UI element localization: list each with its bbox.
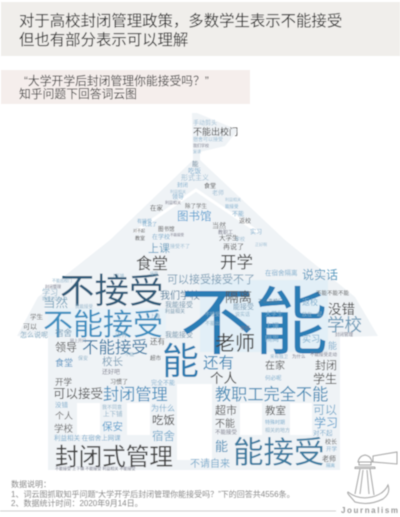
main words, centre and right: 还有 [203, 354, 234, 372]
main words, centre and right: 不能出 [205, 320, 220, 327]
flag words: 我们学校 [193, 142, 209, 148]
panel: title banner [1, 2, 400, 56]
main words, left: 食堂 [55, 357, 73, 368]
tower roof words: 学校 [235, 236, 245, 243]
main words, centre and right: 大学生 [265, 310, 283, 318]
tower roof words: 不能 [232, 210, 244, 218]
lower house words: 开学 [55, 377, 73, 387]
tower roof words: 老师 [212, 189, 224, 197]
lower house words: 上下铺 [103, 409, 123, 418]
upper house words: 食堂 [136, 255, 168, 273]
chart: school-shaped word cloud [17, 113, 378, 471]
tower roof words: 吃饭 [188, 166, 202, 175]
tower roof words: 实习 [250, 228, 262, 236]
panel: title banner: 但也有部分表示可以理解 [19, 31, 188, 49]
tower roof words: 领导 [172, 193, 184, 201]
upper house words: 接受不了 [170, 243, 190, 250]
main words, left: 领导 [55, 341, 77, 354]
tower roof words: 图书馆 [158, 225, 175, 233]
flag words: 不能出校门 [193, 126, 238, 137]
lower house words: 对不起 [313, 428, 333, 437]
tower roof words: 正好啊 [255, 241, 267, 247]
tower roof words: 教职工 [218, 229, 233, 236]
lower house words: 能接受 [233, 436, 324, 470]
lower house words: 相关的地方 [265, 427, 290, 434]
lower house words: 学校 [54, 423, 74, 435]
lower house words: 不能 [215, 417, 235, 430]
lower house words: 没错 [55, 400, 68, 409]
main words, left: 可以接受接受不了 [167, 273, 255, 286]
main words, left: 超市 [150, 354, 162, 362]
flag words: 复课 [193, 148, 201, 154]
main words, centre and right [162, 281, 362, 382]
lower house words: 个人 [55, 411, 73, 421]
main words, centre and right: 封闭 [315, 358, 337, 372]
main words, centre and right: 不能接受走动 [310, 351, 337, 358]
main words, centre and right: 上课 [265, 321, 279, 330]
lower house words: 封闭式管理 [55, 444, 173, 471]
main words, centre and right: 老师 [215, 332, 255, 355]
main words, left: 网上开门 [70, 337, 86, 343]
tower roof words: 当然 [212, 221, 226, 230]
main words, left: 我能接受 [165, 300, 193, 309]
lower house words: 可以接受 [53, 386, 103, 401]
tower roof words: 食堂 [204, 182, 216, 190]
tower roof words: 封闭 [177, 181, 188, 189]
lower house words: 校长 [325, 438, 337, 446]
main words, left: 怎么说呢 [20, 330, 48, 339]
main words, centre and right: 放在一起 [302, 311, 322, 318]
main words, centre and right: 不能不能不能 [316, 289, 350, 297]
main words, centre and right: 隔离 [265, 334, 279, 343]
flag words: 能 [192, 159, 199, 168]
main words, left: 不接受 [60, 273, 164, 311]
lower house words: 何必呢 [265, 374, 282, 382]
lower house words: 特殊时期 [265, 419, 285, 426]
lower house words: 不请自来 [190, 457, 230, 470]
lower house words: 不能接受 上下铺 不能接受 利益相关 不能接受 [55, 465, 135, 471]
flag words: 宿舍可以接受 [193, 136, 223, 143]
main words, left: 还有 [115, 331, 127, 339]
lower house words: 可以 [313, 403, 337, 417]
lower house words: 教室 [265, 404, 286, 417]
main words, centre and right: 不能 [180, 281, 328, 364]
lower house words: 学习 [314, 415, 338, 430]
data notes [11, 479, 295, 508]
main words, left: 不能接受 [82, 338, 148, 357]
lower house words: 宿舍 [152, 429, 175, 443]
main words, left: 学习 [42, 287, 58, 297]
tower roof words: 除了学生 [185, 202, 208, 210]
tower roof words: 利益相关 [165, 199, 181, 205]
icon: lighthouse logo [348, 452, 397, 503]
main words, centre and right: 能 [328, 340, 337, 351]
main words, left: 封闭管理 [45, 283, 61, 289]
main words, left: 学生 [30, 312, 44, 321]
main words, centre and right: 实习 [302, 333, 320, 344]
main words, left: 可以 [23, 323, 37, 331]
lower house words: 还好吧 [102, 368, 120, 376]
main words, left: 利益相关 [165, 308, 185, 315]
tower roof words: 在家 [150, 203, 164, 212]
main words, centre and right: 封闭管理 [335, 331, 353, 338]
tower roof words: 图书馆 [177, 209, 212, 223]
tower roof words: 不能接受 [170, 232, 184, 237]
main words, centre and right: 没错 [328, 302, 355, 317]
tower roof words: 形式主义 [181, 173, 209, 182]
tower roof words: 能接受 [225, 203, 239, 210]
tower roof words: 大学生 [219, 233, 239, 242]
main words, left: 还有 [150, 336, 165, 346]
main words, centre and right: 返校 [302, 297, 318, 307]
lower house words: 完全不能 [151, 379, 175, 387]
main words, centre and right: 说实话 [235, 311, 250, 318]
panel: title banner: 对于高校封闭管理政策，多数学生表示不能接受 [19, 12, 342, 30]
lower house words: 吃饭 [152, 413, 175, 427]
main words, left: 不能出校门 [52, 277, 72, 283]
lower house words: 保安 [102, 420, 123, 433]
main words, left: 保安 [78, 355, 88, 362]
main words, centre and right: 能接受 [233, 302, 254, 311]
tower roof words: 返校 [239, 217, 251, 225]
main words, centre and right: 不接受 [205, 311, 220, 318]
data notes: 1、词云图抓取知乎问题“大学开学后封闭管理你能接受吗？”下的回答共4556条。 [11, 489, 295, 499]
lower house words: 我不同意 [102, 404, 122, 411]
lower house words: 超市 [215, 403, 237, 417]
main words, centre and right: 不以来校门 [258, 298, 283, 305]
lower house words: 能 [215, 439, 228, 454]
main words, left [20, 270, 255, 368]
main words, centre and right: 学校 [327, 315, 362, 335]
panel: chart subtitle [1, 70, 250, 104]
data notes: 2、数据统计时间：2020年9月14日。 [11, 498, 143, 508]
main words, centre and right: 在家 [265, 359, 285, 372]
main words, left: 校长 [102, 355, 123, 368]
panel: chart subtitle: “大学开学后封闭管理你能接受吗？” [24, 74, 209, 88]
main words, centre and right: 能 [162, 341, 199, 382]
main words, left: 宿舍 [55, 328, 73, 338]
lower house words: 老师 [322, 454, 336, 463]
tower roof words [133, 166, 267, 247]
upper house words [136, 242, 338, 282]
lower house words: 学生 [313, 371, 337, 386]
main words, left: 我们学校 [160, 289, 200, 302]
tower roof words: 对不起 [133, 227, 145, 233]
flag words [192, 119, 238, 168]
tower roof words: 教室 [135, 235, 145, 242]
tower roof words: 利益相关 [225, 196, 241, 202]
main words, centre and right: 隔离 [225, 289, 252, 305]
main words, centre and right: 采有独卫 [270, 353, 288, 360]
logo wordmark: Journalism [341, 506, 398, 515]
tower roof words: 利益相关 [170, 188, 186, 194]
main words, left: 当然 [43, 295, 68, 310]
main words, left: 我能接受 [75, 303, 93, 310]
main words, left: 不能接受 [43, 309, 163, 342]
main words, left: 我想说话 [42, 295, 58, 301]
panel: chart subtitle: 知乎问题下回答词云图 [19, 87, 137, 101]
lower house words: 封闭管理 [103, 386, 168, 404]
main words, centre and right: 学校 [240, 325, 250, 332]
lower house words: 教职工完全不能 [215, 386, 328, 404]
lower house words: 隔离 [326, 462, 335, 469]
main words, left: 接受 [150, 270, 158, 276]
upper house words: 说实话 [302, 267, 338, 282]
lower house words: 开学 [326, 445, 338, 453]
main words, left: 我能接受 [165, 330, 193, 339]
lower house words [53, 368, 338, 471]
lower house words: 利益相关 在宿舍上网课 [54, 433, 121, 442]
main words, left: 上海 [150, 313, 160, 320]
upper house words: 开学 [220, 253, 253, 272]
upper house words: 上课 [148, 242, 170, 255]
flag words: 手动剪头 [193, 119, 217, 127]
lower house words: 为什么 [151, 403, 175, 413]
main words, left: 不能 [125, 351, 134, 358]
main words, centre and right: 为什么 [292, 353, 306, 360]
tower roof words: 我说了 [142, 221, 157, 228]
house silhouette background [17, 113, 378, 470]
lower house words: 习惯了 [110, 378, 128, 386]
lower house words: 不能接受 [215, 428, 238, 436]
upper house words: 再说了 [223, 242, 244, 251]
upper house words: 在宿舍隔离 [265, 268, 298, 277]
tower roof words: 有接受 [137, 218, 152, 225]
tower roof words: 在学校 [152, 233, 170, 241]
lower house words: 个人 [210, 371, 237, 386]
main words, left: 上下铺 [112, 272, 124, 278]
data notes: 数据说明： [11, 479, 51, 489]
